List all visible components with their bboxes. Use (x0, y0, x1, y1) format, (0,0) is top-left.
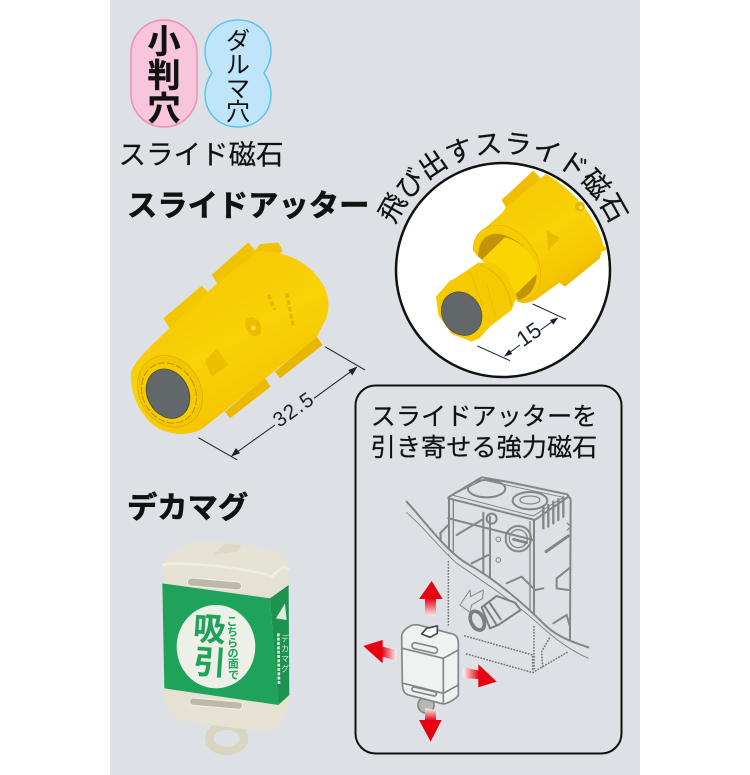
badge: ダルマ穴: ダ (226, 28, 250, 55)
product photo: デカマグ magnet: で (228, 669, 239, 681)
product photo: デカマグ magnet: デ (281, 634, 289, 644)
product photo: デカマグ magnet: 引 (193, 643, 228, 682)
product photo: デカマグ magnet: カ (281, 645, 289, 654)
slide adapter knob (467, 596, 521, 632)
heading: スライドアッター: スライドアッター (127, 189, 369, 223)
callout panel: 強力磁石 (356, 386, 622, 754)
badge: 小判穴: 判 (148, 57, 180, 94)
badge: 小判穴: 小 (148, 23, 180, 60)
badge: ダルマ穴: 穴 (226, 99, 250, 126)
diagram: magnet through wall (363, 477, 590, 742)
product photo: デカマグ magnet: マ (281, 655, 289, 664)
product photo: デカマグ magnet: こ (226, 616, 237, 628)
product photo: デカマグ magnet (162, 541, 289, 751)
switch box line art (440, 477, 571, 640)
product photo: slide adapter (125, 242, 365, 460)
badge: 小判穴 (131, 20, 197, 127)
product photo: extended slide magnet (433, 171, 607, 361)
callout heading: 引き寄せる強力磁石 (371, 434, 597, 462)
red arrow: left (363, 640, 397, 663)
red arrow: up (419, 581, 443, 617)
dotted hidden lines (448, 562, 568, 673)
hollow arrow (460, 590, 483, 612)
magnet outline (402, 625, 458, 713)
slots (187, 578, 242, 590)
green label band (162, 583, 278, 705)
dimension: 15: 15 (512, 317, 546, 352)
curved label: 飛び出すスライド磁石: 飛び出すスライド磁石 (376, 132, 630, 224)
badge: ダルマ穴: マ (226, 76, 250, 103)
dimension: 15 (477, 304, 566, 361)
wall outline (407, 502, 588, 647)
badge: ダルマ穴 (205, 20, 271, 127)
label: スライド磁石: スライド磁石 (118, 139, 284, 170)
red arrow: right (463, 664, 497, 687)
product photo: デカマグ magnet: の (227, 648, 238, 660)
background panel (110, 0, 640, 775)
callout heading: スライドアッターを (371, 403, 597, 431)
product photo: デカマグ magnet: ら (227, 636, 238, 649)
dimension: 32.5: 32.5 (269, 388, 318, 432)
product photo: デカマグ magnet: 面 (228, 658, 239, 671)
circle inset: extended magnet (396, 163, 610, 377)
ring loop (209, 726, 244, 751)
wall cover (407, 513, 590, 713)
red arrow: down (419, 708, 442, 742)
heading: デカマグ: デカマグ (127, 490, 248, 525)
dimension: 32.5 (198, 347, 365, 460)
badge: 小判穴: 穴 (148, 90, 180, 127)
product photo: デカマグ magnet: 吸 (192, 610, 227, 649)
product photo: デカマグ magnet: ち (227, 626, 238, 639)
badge: ダルマ穴: ル (226, 52, 250, 79)
product photo: デカマグ magnet: グ (281, 664, 289, 674)
